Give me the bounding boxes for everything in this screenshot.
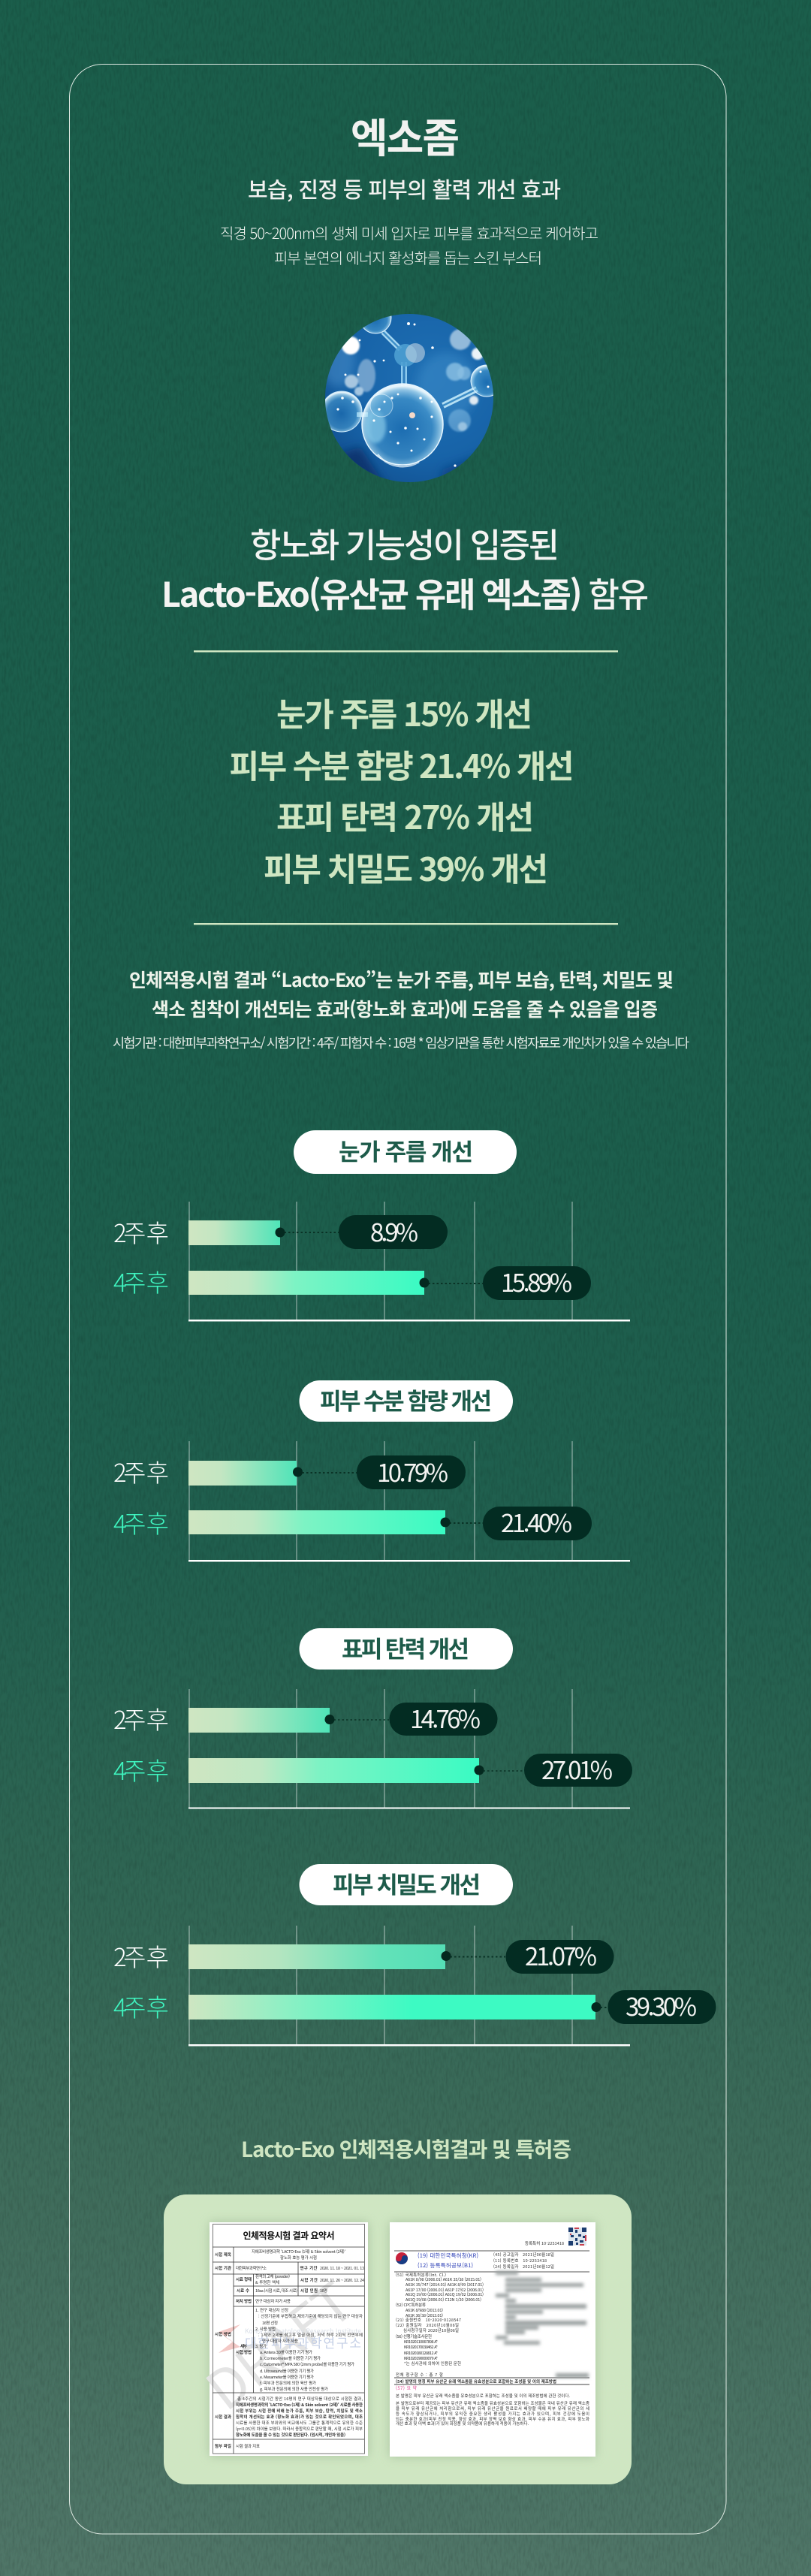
document: patent: KR1020180128812 A* <box>404 2350 438 2356</box>
document: human test summary: 항노화에 도움을 줄 수 있는 것으로 판단된다. (임시적, 개인차 있음) <box>236 2432 345 2438</box>
patent office titles <box>418 2252 478 2270</box>
document: human test summary: 시험 방법 <box>215 2331 231 2337</box>
panel: certificates <box>164 2194 632 2484</box>
watermark: Korea Dermatology Research Institute <box>245 2327 361 2336</box>
document: human test summary: a. Antera 3D를 이용한 기기 평가 <box>260 2349 312 2355</box>
document: patent: A61K 36/38 (2013.01) <box>406 2312 443 2318</box>
chart: wrinkle <box>113 1130 630 1322</box>
row: 2 weeks <box>113 1453 466 1489</box>
document: patent: (51) 국제특허분류(Int. Cl.) <box>396 2272 446 2278</box>
document: human test summary: d. Ultrasound를 이용한 기기 평가 <box>260 2368 314 2374</box>
divider top <box>194 650 618 652</box>
row: 4 weeks: 27.01% <box>541 1751 613 1787</box>
row: 2 weeks: 2주 후 <box>113 1214 169 1250</box>
document: human test summary: 1. 연구 대상자 선정 <box>255 2307 288 2313</box>
document: patent <box>390 2222 595 2457</box>
document: human test summary: 연구 대상자 자가 사용 <box>255 2298 291 2304</box>
row: 4 weeks <box>113 1751 632 1787</box>
headline: 항노화 기능성이 입증된 <box>250 518 559 567</box>
test summary <box>129 966 674 1022</box>
key results: 피부 치밀도 39% 개선 <box>264 844 548 891</box>
document: human test summary: 2. 사용 방법 <box>255 2326 276 2332</box>
document: patent: 본 발명은 피부 유산균 유래 엑소좀을 유효성분으로 포함하는 조성물 및 이의 제조방법에 관한 것이다. <box>396 2393 570 2399</box>
row: 2 weeks: 2주 후 <box>113 1453 169 1489</box>
image: exosome molecule <box>325 314 493 482</box>
document: human test summary: 연구 기간 <box>300 2265 318 2271</box>
icon: taegeuk emblem <box>396 2252 408 2264</box>
document: human test summary: 총 4주간의 시험기간 동안 16명의 연구 대상자를 대상으로 시험한 결과, <box>237 2396 363 2402</box>
document: patent: KR1020190000079 A* <box>404 2355 438 2361</box>
row: 2 weeks: 10.79% <box>377 1453 448 1489</box>
document: human test summary: 16명 선정 <box>262 2320 278 2326</box>
test summary: 색소 침착이 개선되는 효과(항노화 효과)에 도움을 줄 수 있음을 입증 <box>152 995 658 1022</box>
document: patent: (11) 등록번호 10-2253418 <box>493 2258 547 2264</box>
row: 4 weeks: 4주 후 <box>113 1263 169 1299</box>
document: human test summary: & 투명한 액체 <box>255 2279 279 2285</box>
chart title pill <box>299 1628 513 1670</box>
key results <box>230 689 574 891</box>
document: patent: 을 피부 유래 유산균에 처리함으로써, 피부 유래 유산균을 원료로서 배양할 때에 피부 유래 유산균의 세 <box>396 2406 589 2412</box>
row: 4 weeks: 39.30% <box>626 1987 697 2023</box>
document: patent: KR1020110067898 A* <box>404 2339 438 2345</box>
row: 2 weeks: 2주 후 <box>113 1938 169 1974</box>
chart title pill: 눈가 주름 개선 <box>339 1133 473 1167</box>
row: 4 weeks: 15.89% <box>501 1263 572 1299</box>
chart title pill: 표피 탄력 개선 <box>342 1630 469 1664</box>
chart: elasticity <box>113 1628 632 1808</box>
document: patent: (52) CPC특허분류 <box>396 2302 426 2308</box>
document: patent: A61K 8/98 (2006.01) A61K 35/38 (2015.01) <box>406 2276 481 2282</box>
document: human test summary: 연구 대상자 자가 사용 <box>262 2338 298 2344</box>
document: human test summary: 시험 방법 <box>236 2349 252 2355</box>
document: human test summary: 2020. 11. 18 ~ 2021. 01. 13 <box>320 2265 364 2271</box>
document: human test summary: 첨부 파일 <box>215 2443 231 2449</box>
document: human test summary <box>187 2222 368 2456</box>
row: 4 weeks <box>113 1987 716 2024</box>
document: human test summary: 지에프비생명과학의 'LACTO-Exo (1제) & Skin solvent (2제)' 시료를 사용한 <box>236 2402 363 2408</box>
certificates heading: Lacto-Exo 인체적용시험결과 및 특허증 <box>241 2134 571 2164</box>
row: 4 weeks <box>113 1263 591 1300</box>
row: 2 weeks <box>113 1700 497 1736</box>
chart title pill <box>299 1864 513 1905</box>
row: 4 weeks: 21.40% <box>501 1504 572 1540</box>
watermark: 대한피부과학연구소 <box>245 2333 361 2351</box>
document: human test summary: 시험 인원 <box>300 2288 318 2294</box>
document: patent: (57) 요 약 <box>396 2384 417 2391</box>
document: patent: (21) 출원번호 10-2020-0128547 <box>396 2317 461 2323</box>
document: human test summary: : 선정기준에 부합하고 제외기준에 해당되지 않는 연구 대상자 <box>258 2313 363 2319</box>
document: human test summary: 시험 제목 <box>215 2252 231 2258</box>
row: 4 weeks <box>113 1504 592 1540</box>
document: patent: KR1020170038462 A* <box>404 2344 438 2350</box>
document: human test summary: 16명 <box>320 2288 327 2294</box>
document: patent: 심사청구일자 2020년10월06일 <box>403 2327 459 2333</box>
key results: 표피 탄력 27% 개선 <box>276 792 534 839</box>
document: human test summary: 시료 수 <box>237 2288 249 2294</box>
chart title pill <box>299 1380 513 1422</box>
document: human test summary: 3. 평가 <box>255 2343 267 2349</box>
row: 2 weeks: 21.07% <box>525 1937 597 1973</box>
row: 2 weeks: 8.9% <box>370 1213 418 1249</box>
document: patent: A61P 17/00 (2006.01) A61P 17/02 (2006.01) <box>406 2287 484 2293</box>
key results: 눈가 주름 15% 개선 <box>276 689 532 736</box>
subtitle: 보습, 진정 등 피부의 활력 개선 효과 <box>248 173 561 204</box>
document: human test summary: g. 피부과 전문의에 의한 사용 안전성 평가 <box>260 2386 328 2392</box>
document: human test summary: 지에프비생명과학 'LACTO-Exo (1제) & Skin solvent (2제)' <box>252 2249 345 2255</box>
document: human test summary: : 1제와 2제를 섞고후 얼굴 아침, 저녁 하루 2회씩 전면부에 <box>258 2332 363 2338</box>
divider bottom <box>194 923 618 925</box>
document: human test summary: f. 피부과 전문의에 의한 육안 평가 <box>260 2380 316 2386</box>
document: human test summary: 처치 방법 <box>236 2298 252 2304</box>
footnote: 시험기관 : 대한피부과학연구소/ 시험기간 : 4주/ 피험자 수 : 16명 * 임상기관을 통한 시험자료로 개인차가 있을 수 있습니다 <box>113 1033 689 1052</box>
document: patent: (45) 공고일자 2021년06월18일 <box>493 2252 554 2258</box>
icon: QR code <box>568 2228 586 2246</box>
document: human test summary: e. Mexameter를 이용한 기기 평가 <box>260 2374 314 2380</box>
chart: density <box>113 1864 716 2046</box>
document: human test summary: 시료를 사용한 대조 부위와의 비교에서도 그룹간 통계적으로 유의한 수준 <box>236 2420 363 2426</box>
chart title pill: 피부 치밀도 개선 <box>333 1866 481 1900</box>
chart title pill <box>294 1130 517 1174</box>
row: 4 weeks: 4주 후 <box>113 1988 169 2024</box>
row: 4 weeks: 4주 후 <box>113 1504 169 1540</box>
row: 2 weeks: 14.76% <box>410 1700 481 1736</box>
document: patent: A61K 8/988 (2013.01) <box>406 2307 443 2313</box>
watermark: DRAFT <box>187 2261 367 2425</box>
document: human test summary: 인체적용시험 결과 요약서 <box>243 2229 335 2242</box>
description: 직경 50~200nm의 생체 미세 입자로 피부를 효과적으로 케어하고 <box>220 222 598 243</box>
row: 4 weeks: 4주 후 <box>113 1751 169 1787</box>
document: human test summary: 2020. 11. 26 ~ 2020. 12. 24 <box>320 2277 364 2283</box>
document: human test summary: b. Corneometer를 이용한 기기 평가 <box>260 2355 321 2361</box>
chart: hydration <box>113 1380 630 1562</box>
document: patent: (22) 출원일자 2020년10월06일 <box>396 2322 459 2328</box>
document: patent: 등 속도가 향상되거나, 피부의 유익한 중요한 생리 활성을 가지는 효과가 있으며, 피부 건강에 도움이 <box>396 2411 589 2417</box>
document: patent: A61Q 19/00 (2006.01) A61Q 19/02 (2006.01) <box>406 2291 484 2297</box>
description <box>220 222 598 268</box>
outer rounded frame <box>69 65 726 2534</box>
document: human test summary: 대한피부과학연구소 <box>236 2265 267 2271</box>
document: human test summary: 흰색의 고체 (powder) <box>255 2273 290 2279</box>
document: human test summary: 시험 기관 <box>215 2265 231 2271</box>
row: 2 weeks: 2주 후 <box>113 1700 169 1736</box>
document: human test summary: 16ea (시험 시료, 대조 시료) <box>255 2288 297 2294</box>
document: human test summary: c. Cutometer® MPA 580 (2mm probe)를 이용한 기기 평가 <box>260 2361 354 2367</box>
headline <box>161 518 649 617</box>
document: patent: (24) 등록일자 2021년06월12일 <box>493 2264 554 2270</box>
chart title pill: 피부 수분 함량 개선 <box>320 1383 492 1416</box>
document: human test summary: 시료 형태 <box>236 2276 252 2282</box>
document: patent: 등록특허 10-2253418 <box>525 2240 564 2246</box>
headline: Lacto-Exo(유산균 유래 엑소좀) 함유 <box>161 568 649 617</box>
patent office titles: (12) 등록특허공보(B1) <box>418 2261 473 2270</box>
document: patent: (56) 선행기술조사문헌 <box>396 2333 432 2339</box>
description: 피부 본연의 에너지 활성화를 돕는 스킨 부스터 <box>274 246 542 268</box>
document: patent: 개선 효과 및 미백 효과)가 있어 화장품 및 의약품에 유용하게 적용이 가능하다. <box>396 2421 529 2427</box>
document: patent: A61Q 19/08 (2006.01) C12N 1/20 (2006.01) <box>406 2297 481 2303</box>
document: human test summary: 시험 결과 <box>215 2414 231 2420</box>
document: human test summary: (p<0.05)의 차이를 보였다. 따라서 종합적으로 판단할 때, 시험 시료가 피부 <box>236 2426 363 2432</box>
document: patent: 되는 충분한 효과(피부 진정 작용, 향상 효과, 피부 장벽 보호 향상 효과, 피부 수분 유지 효과, 피부 항노화 <box>396 2416 589 2422</box>
test summary: 인체적용시험 결과 “Lacto-Exo”는 눈가 주름, 피부 보습, 탄력, 치밀도 및 <box>129 966 674 993</box>
row: 2 weeks <box>113 1937 614 1974</box>
document: human test summary: 시험 기간 <box>300 2277 318 2283</box>
document: human test summary: 세부 <box>240 2343 247 2349</box>
document: patent: 본 발명으로부터 제공되는 피부 유산균 유래 엑소좀을 유효성분으로 포함하는 조성물은 국내 유산균 유래 엑소좀 <box>396 2400 589 2406</box>
document: patent: (54) 발명의 명칭 피부 유산균 유래 엑소좀을 유효성분으로 포함하는 조성물 및 이의 제조방법 <box>396 2378 556 2384</box>
row: 2 weeks <box>113 1213 448 1250</box>
document: human test summary: 침착이 개선되는 효과 (항노화 효과)가 있는 것으로 확인되었으며, 대조 <box>236 2414 363 2420</box>
document: human test summary: 항노화 효능 평가 시험 <box>280 2255 317 2261</box>
document: patent: A61K 35/747 (2014.01) A61K 8/99 (2017.01) <box>406 2282 484 2288</box>
document: human test summary: 시험 결과 지표 <box>236 2443 260 2449</box>
key results: 피부 수분 함량 21.4% 개선 <box>230 741 574 788</box>
patent office titles: (19) 대한민국특허청(KR) <box>418 2252 478 2260</box>
title: 엑소좀 <box>351 105 460 164</box>
document: patent: 전체 청구항 수 : 총 7 항 <box>396 2372 443 2378</box>
document: human test summary: 시험 부위는 시험 전에 비해 눈가 주름, 피부 보습, 탄력, 치밀도 및 색소 <box>236 2408 363 2414</box>
document: patent: *는 심사관에 의하여 인용된 문헌 <box>404 2360 461 2366</box>
